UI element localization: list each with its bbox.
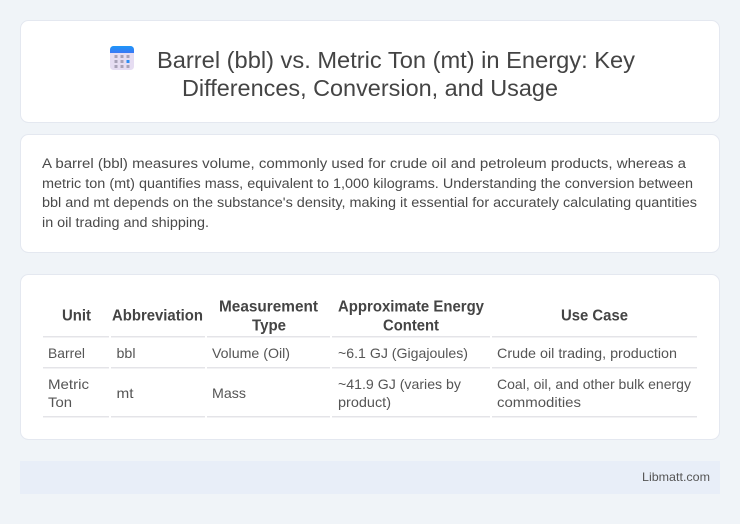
table row: barrel: bbl [116, 345, 136, 361]
text block: description: in oil trading and shipping. [42, 215, 209, 231]
table row: barrel: Volume (Oil) [212, 345, 290, 361]
table row: barrel: ~6.1 GJ (Gigajoules) [338, 345, 468, 361]
table row: barrel [48, 345, 677, 361]
text block: description: metric ton (mt) quantifies mass, equivalent to 1,000 kilograms. Understanding the conversion between [42, 176, 693, 192]
table header: Unit [62, 308, 91, 324]
table row: barrel: Crude oil trading, production [497, 345, 677, 361]
text block: description [42, 156, 697, 231]
panel: description [20, 134, 720, 252]
table row: metric ton: Mass [212, 385, 246, 401]
table header: Use Case [561, 308, 628, 324]
text block: description: bbl and mt depends on the substance's density, making it essential for accurately calculating quantities [42, 195, 697, 211]
heading: Differences, Conversion, and Usage [182, 75, 558, 101]
footer [20, 461, 720, 494]
text block: description: A barrel (bbl) measures volume, commonly used for crude oil and petroleum products, whereas a [42, 156, 686, 172]
footer: Libmatt.com [642, 470, 710, 484]
table row: metric ton: Metric [48, 376, 89, 392]
table row: metric ton: mt [116, 385, 134, 401]
table row: metric ton: commodities [497, 394, 581, 410]
heading [157, 47, 635, 101]
icon: calendar [110, 46, 134, 70]
table row: metric ton: Coal, oil, and other bulk energy [497, 376, 691, 392]
table row: metric ton [48, 376, 691, 410]
table row: barrel: Barrel [48, 345, 85, 361]
table row: metric ton: product) [338, 394, 391, 410]
heading: Barrel (bbl) vs. Metric Ton (mt) in Energy: Key [157, 47, 635, 73]
table row: metric ton: Ton [48, 394, 72, 410]
table row: metric ton: ~41.9 GJ (varies by [338, 376, 461, 392]
panel: title [20, 20, 720, 122]
table header [62, 298, 628, 334]
panel: comparison table [20, 274, 720, 440]
table header: Measurement [219, 298, 318, 316]
table header: Abbreviation [112, 308, 203, 324]
table header: Approximate Energy [338, 298, 484, 316]
table header: Content [383, 318, 439, 334]
table header: Type [252, 318, 286, 334]
